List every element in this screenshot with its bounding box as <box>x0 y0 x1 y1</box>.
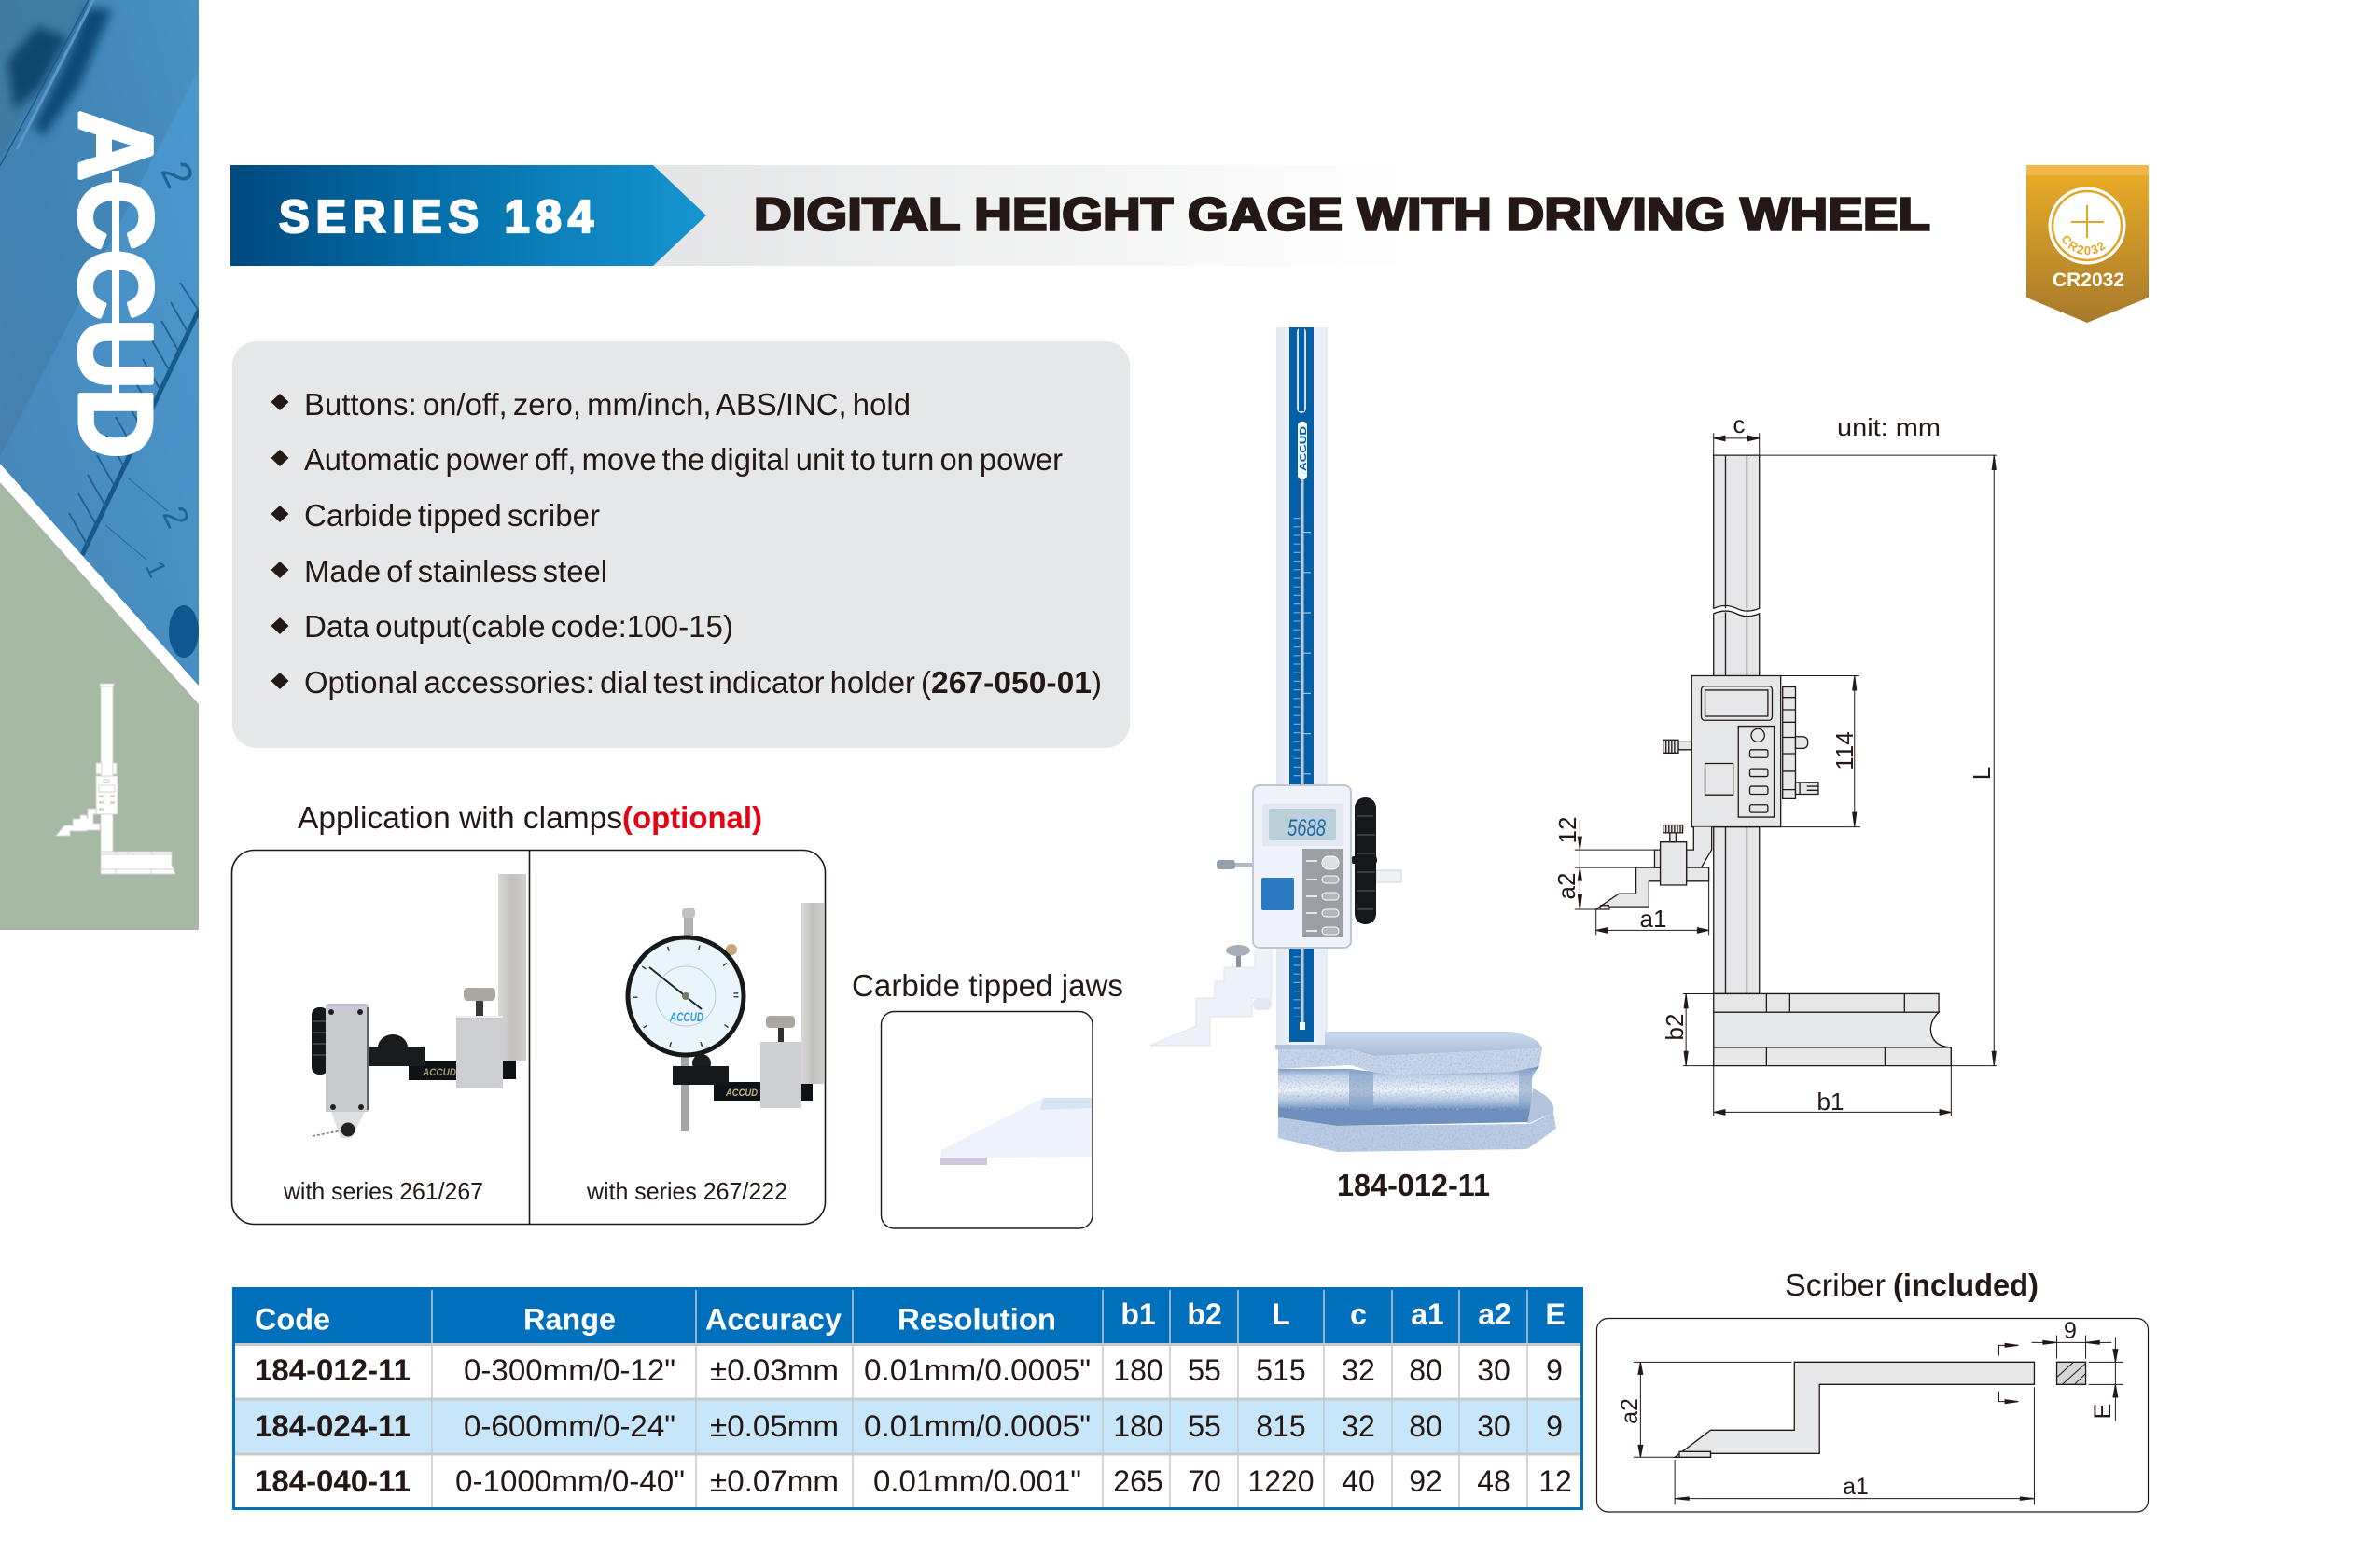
row: 184-040-11: 1220 <box>1247 1464 1315 1498</box>
row: 184-024-11: 180 <box>1113 1409 1163 1443</box>
panel: features <box>232 341 1130 748</box>
row: 184-012-11: 80 <box>1409 1353 1442 1387</box>
sliding scriber assembly <box>1150 945 1272 1046</box>
scriber labels: 9 <box>2064 1318 2077 1344</box>
scriber dimensions <box>1634 1336 2123 1504</box>
heading: application with clamps: (optional) <box>622 800 762 835</box>
heading: scriber included: (included) <box>1893 1268 2039 1302</box>
blue ruler photo panel <box>0 0 202 690</box>
row: 184-040-11: 0.01mm/0.001" <box>873 1464 1081 1498</box>
row: 184-040-11: 0-1000mm/0-40" <box>455 1464 685 1498</box>
row: 184-040-11 <box>255 1464 1572 1498</box>
blue ruler photo panel: 2 <box>151 155 202 195</box>
blue ruler photo panel: 2 <box>155 501 198 534</box>
left side band <box>0 0 202 930</box>
row: 184-012-11 <box>255 1353 1563 1387</box>
table header: a1 <box>1411 1297 1444 1331</box>
row: 184-012-11: 0-300mm/0-12" <box>464 1353 675 1387</box>
table header: b2 <box>1187 1297 1222 1331</box>
photo: dial indicator with series 267/222 <box>628 903 824 1131</box>
table header: Accuracy <box>705 1302 842 1336</box>
gage column: ACCUD <box>1299 426 1309 471</box>
photo: indicator with series 261/267: ACCUD <box>422 1067 456 1078</box>
header fading gray bar <box>653 165 1411 266</box>
left locking screw <box>1217 860 1254 869</box>
badge: CR2032 battery: CR2032 <box>2062 235 2107 256</box>
table background and rows <box>232 1287 1583 1510</box>
row: 184-040-11: ±0.07mm <box>710 1464 839 1498</box>
row: 184-012-11: 30 <box>1477 1353 1510 1387</box>
heading: scriber included: Scriber <box>1785 1268 1886 1302</box>
row: 184-024-11: 55 <box>1188 1409 1221 1443</box>
row: 184-012-11: 55 <box>1188 1353 1221 1387</box>
row: 184-012-11: 9 <box>1546 1353 1563 1387</box>
panel: scriber drawing <box>1597 1318 2148 1512</box>
heading: scriber included <box>1785 1268 2039 1302</box>
dimension labels: a1 <box>1640 905 1666 933</box>
series label: SERIES 184 <box>279 192 596 243</box>
row: 184-024-11: 0.01mm/0.0005" <box>864 1409 1091 1443</box>
table header: E <box>1545 1297 1566 1331</box>
row: 184-012-11: 0.01mm/0.0005" <box>864 1353 1091 1387</box>
row: 184-040-11: 184-040-11 <box>255 1464 411 1498</box>
gage column <box>1276 327 1328 1050</box>
drawing outlines <box>1596 455 1951 1066</box>
dimension labels: a2 <box>1552 873 1580 899</box>
row: 184-012-11: 515 <box>1256 1353 1306 1387</box>
scriber labels: a2 <box>1617 1398 1643 1424</box>
table header: Resolution <box>898 1302 1056 1336</box>
main title: DIGITAL HEIGHT GAGE WITH DRIVING WHEEL <box>754 190 1930 241</box>
heading: carbide tipped jaws: Carbide tipped jaws <box>852 968 1123 1003</box>
dimension labels <box>1552 410 1996 1116</box>
blue ruler photo panel: 1 <box>140 556 173 582</box>
feature: accessories: 267-050-01 <box>931 665 1092 700</box>
dimension labels: L <box>1968 767 1996 780</box>
table header <box>255 1297 1566 1336</box>
feature: steel: Made of stainless steel <box>304 554 607 589</box>
driving wheel and axle <box>1351 797 1401 924</box>
photo: dial indicator with series 267/222: ACCUD <box>669 1009 703 1024</box>
feature: power off: Automatic power off, move the digital unit to turn on power <box>304 442 1063 477</box>
technical drawing: height gage dimensions <box>1552 410 1997 1116</box>
row: 184-012-11: 180 <box>1113 1353 1163 1387</box>
feature: buttons: Buttons: on/off, zero, mm/inch, ABS/INC, hold <box>304 387 911 422</box>
scriber labels <box>1617 1318 2116 1500</box>
scriber outline <box>1675 1362 2086 1457</box>
table header: Code <box>255 1302 330 1336</box>
table header: b1 <box>1120 1297 1156 1331</box>
dimension labels: 12 <box>1553 817 1581 843</box>
feature: scriber: Carbide tipped scriber <box>304 498 600 533</box>
row: 184-024-11: ±0.05mm <box>710 1409 839 1443</box>
dimension labels: b1 <box>1817 1088 1844 1116</box>
dimension labels: unit: mm <box>1837 413 1941 441</box>
row: 184-040-11: 265 <box>1113 1464 1163 1498</box>
photo: indicator with series 261/267 <box>312 874 526 1138</box>
scriber labels: a1 <box>1843 1474 1869 1500</box>
heading: application with clamps: Application with clamps <box>298 800 622 835</box>
row: 184-012-11: 32 <box>1342 1353 1375 1387</box>
photo: dial indicator with series 267/222: ACCUD <box>725 1088 758 1099</box>
table header: Range <box>523 1302 616 1336</box>
row: 184-040-11: 70 <box>1188 1464 1221 1498</box>
dimension lines and arrows <box>1575 433 1997 1116</box>
digital display head: 5688 <box>1287 815 1326 841</box>
caption: series 267/222: with series 267/222 <box>586 1177 787 1205</box>
dimension labels: c <box>1733 410 1745 438</box>
row: 184-040-11: 12 <box>1538 1464 1572 1498</box>
row: 184-024-11: 184-024-11 <box>255 1409 411 1443</box>
icon: height gage silhouette <box>56 684 175 874</box>
header: series banner <box>230 165 1930 266</box>
row: 184-024-11: 0-600mm/0-24" <box>464 1409 675 1443</box>
scriber labels: E <box>2090 1404 2116 1419</box>
heading: application with clamps <box>298 800 762 835</box>
digital display head <box>1253 785 1351 948</box>
row: 184-012-11: ±0.03mm <box>710 1353 839 1387</box>
row: 184-040-11: 40 <box>1342 1464 1375 1498</box>
ACCUD logo: ACCUD <box>58 111 173 458</box>
dimension labels: b2 <box>1661 1014 1689 1040</box>
row: 184-024-11 <box>255 1409 1563 1443</box>
badge: CR2032 battery <box>2026 165 2149 323</box>
row: 184-024-11: 30 <box>1477 1409 1510 1443</box>
panel: carbide jaw photo <box>881 1011 1093 1228</box>
badge: CR2032 battery: CR2032 <box>2053 270 2124 291</box>
panel: clamp applications <box>231 850 825 1225</box>
row: 184-040-11: 48 <box>1477 1464 1510 1498</box>
specification table <box>232 1287 1583 1510</box>
product photo: digital height gage <box>1150 327 1556 1152</box>
feature: accessories: ) <box>1092 665 1102 700</box>
product code label: 184-012-11 <box>1337 1168 1490 1202</box>
series arrow <box>230 165 706 266</box>
caption: series 261/267: with series 261/267 <box>283 1177 483 1205</box>
green lower panel <box>0 482 199 930</box>
table header: c <box>1350 1297 1367 1331</box>
feature: data output: Data output(cable code:100-15) <box>304 609 733 644</box>
table header: L <box>1272 1297 1290 1331</box>
steel base <box>1275 1032 1556 1152</box>
row: 184-024-11: 815 <box>1256 1409 1306 1443</box>
row: 184-024-11: 80 <box>1409 1409 1442 1443</box>
dimension labels: 114 <box>1830 731 1858 770</box>
row: 184-024-11: 9 <box>1546 1409 1563 1443</box>
table header: a2 <box>1478 1297 1511 1331</box>
row: 184-012-11: 184-012-11 <box>255 1353 411 1387</box>
feature: accessories: Optional accessories: dial test indicator holder ( <box>304 665 931 700</box>
row: 184-040-11: 92 <box>1409 1464 1442 1498</box>
row: 184-024-11: 32 <box>1342 1409 1375 1443</box>
